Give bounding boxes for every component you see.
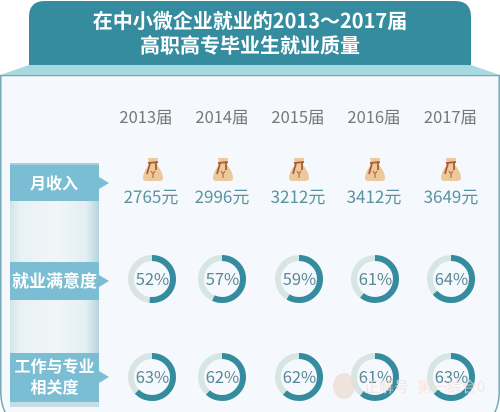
- year headers: 2014届: [195, 104, 249, 128]
- ring: 59%: 59%: [283, 266, 316, 290]
- year headers: 2015届: [271, 104, 325, 128]
- ring: 57%: 57%: [206, 266, 239, 290]
- title: [93, 5, 407, 58]
- ring: 63%: 63%: [136, 364, 169, 388]
- ring: 63%: [131, 356, 173, 398]
- ring: 57%: [201, 258, 243, 300]
- label: monthly income: [10, 165, 109, 201]
- ring: 63%: 63%: [435, 364, 468, 388]
- income row: [124, 158, 478, 208]
- ring: 61%: 61%: [359, 266, 392, 290]
- watermark: [333, 373, 485, 399]
- label: job relevance: 相关度: [30, 374, 79, 398]
- label: job satisfaction: [10, 262, 109, 300]
- ring: 62%: [201, 356, 243, 398]
- income values: [124, 183, 478, 208]
- label: job relevance: 工作与专业: [14, 353, 95, 377]
- label: job relevance: [10, 353, 109, 402]
- ring: 61%: 61%: [359, 364, 392, 388]
- title: 在中小微企业就业的2013～2017届: [93, 5, 407, 34]
- income values: 3212元: [271, 183, 325, 208]
- ring: 64%: 64%: [435, 266, 468, 290]
- icon: money bag 2017: [441, 158, 461, 181]
- ring: 62%: [278, 356, 320, 398]
- header flap: [0, 65, 500, 75]
- icon: money bag 2013: [143, 158, 163, 181]
- ring: 59%: [278, 258, 320, 300]
- watermark: 正解号: [364, 376, 409, 397]
- icon: money bag 2015: [289, 158, 309, 181]
- icon: money bag 2016: [365, 158, 385, 181]
- label: monthly income: 月收入: [30, 170, 78, 194]
- ring: 52%: [131, 258, 173, 300]
- watermark: 第一综合0: [417, 376, 485, 397]
- title: 高职高专毕业生就业质量: [140, 30, 360, 58]
- ring: 61%: [354, 356, 396, 398]
- icon: money bag 2014: [213, 158, 233, 181]
- ring: 62%: 62%: [283, 364, 316, 388]
- title banner: [29, 1, 471, 65]
- relevance row: [131, 356, 472, 398]
- label: job satisfaction: 就业满意度: [12, 267, 97, 292]
- row label column: [10, 163, 109, 407]
- ring: 52%: 52%: [136, 266, 169, 290]
- ring: 64%: [430, 258, 472, 300]
- income values: 2996元: [195, 183, 249, 208]
- year headers: 2013届: [119, 104, 173, 128]
- year headers: 2016届: [347, 104, 401, 128]
- year headers: 2017届: [424, 104, 477, 128]
- ring: 62%: 62%: [206, 364, 239, 388]
- income values: 3649元: [424, 183, 478, 208]
- income values: 3412元: [347, 183, 401, 208]
- year headers: [119, 104, 477, 128]
- ring: 63%: [430, 356, 472, 398]
- satisfaction row: [131, 258, 472, 300]
- ring: 61%: [354, 258, 396, 300]
- income values: 2765元: [124, 183, 178, 208]
